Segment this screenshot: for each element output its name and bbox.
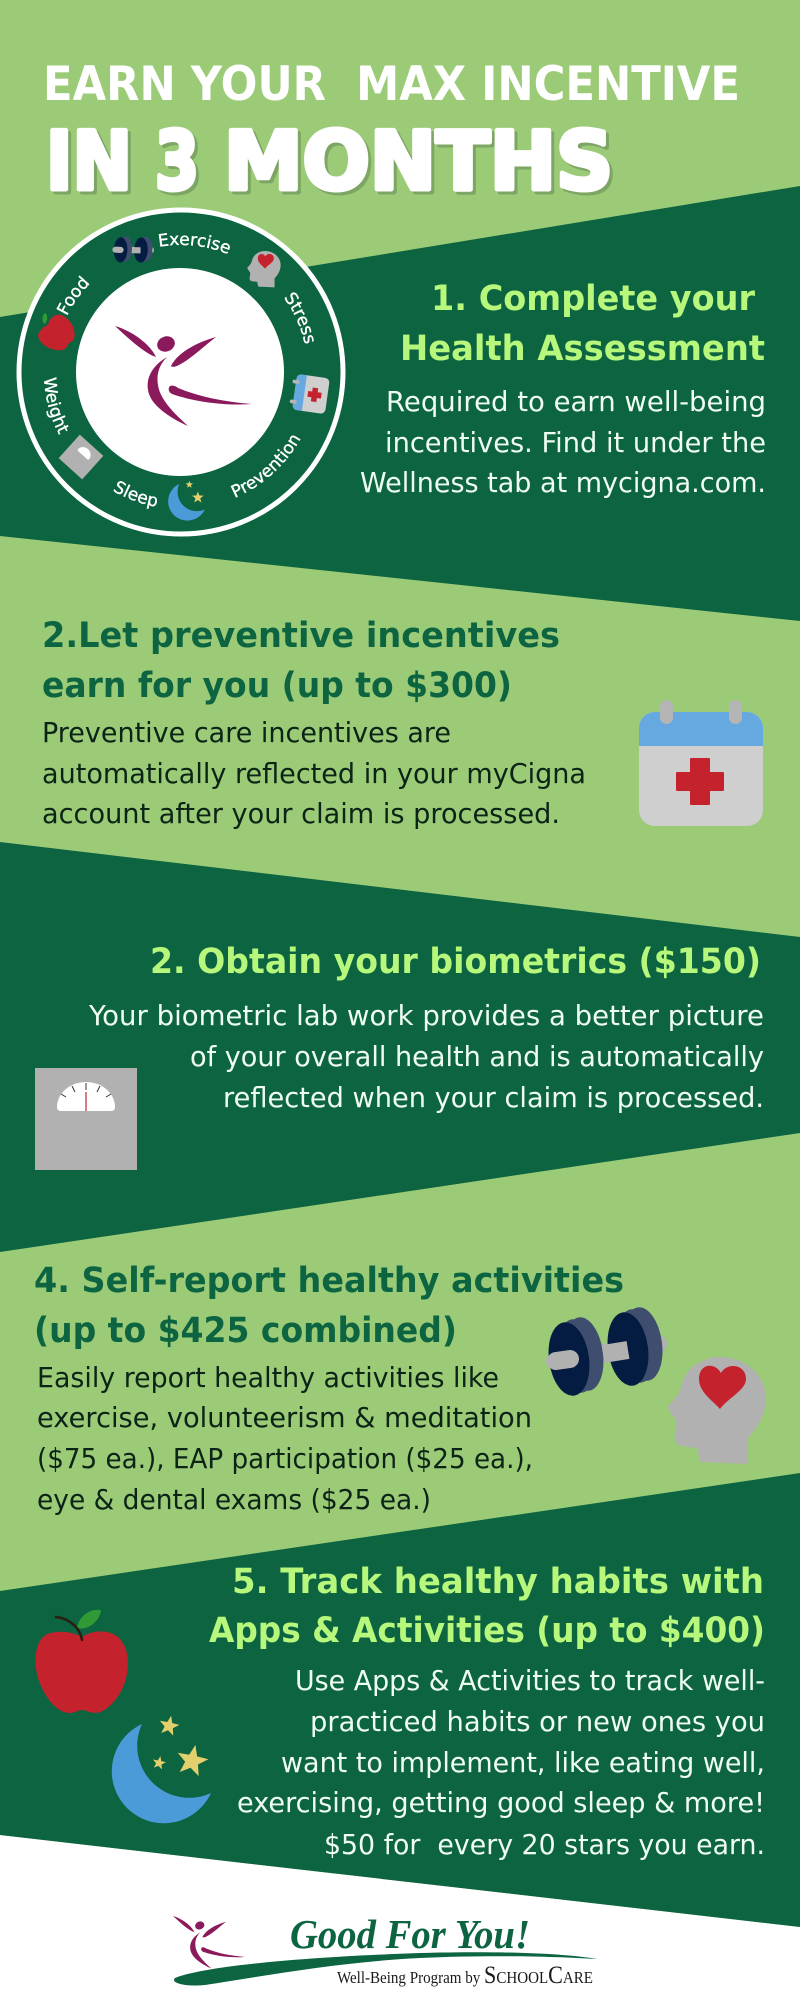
text block: step 5: Use Apps & Activities to track well- (295, 1665, 765, 1697)
heading: step 3: 2. Obtain your biometrics ($150) (150, 942, 761, 982)
heading: step 2: 2.Let preventive incentives (42, 616, 560, 656)
icon: small apple (29, 305, 81, 357)
logo figure (173, 1916, 245, 1968)
heading: step 4: (up to $425 combined) (34, 1311, 457, 1351)
wheel label: stress: Stress (284, 292, 314, 344)
text block: step 5: exercising, getting good sleep & more! (237, 1787, 765, 1819)
icon: weight scale (35, 1068, 137, 1170)
heading: step 2: earn for you (up to $300) (42, 666, 512, 706)
panel: step 2 preventive incentives (42, 616, 763, 830)
text block: step 2 (42, 717, 586, 830)
heading: step 4: 4. Self-report healthy activities (34, 1261, 624, 1301)
wheel label: prevention: Prevention (230, 436, 300, 498)
heading: step 4 (34, 1261, 624, 1351)
text block: step 2: automatically reflected in your myCigna (42, 758, 586, 790)
panel: step 3 biometrics (0, 842, 800, 1252)
wheel label: weight: Weight (44, 377, 68, 435)
heading: step 1: Health Assessment (400, 329, 765, 369)
logo wordmark: Good For You! (290, 1911, 530, 1957)
panel: step 1 health assessment (0, 186, 800, 621)
text block: step 1: Required to earn well-being (386, 386, 766, 418)
title: IN (46, 115, 132, 208)
text block: step 4: eye & dental exams ($25 ea.) (37, 1484, 431, 1516)
heading: step 2 (42, 616, 560, 706)
text block: step 4 (37, 1362, 533, 1516)
heading: step 1: 1. Complete your (431, 279, 756, 319)
wheel label: sleep: Sleep (114, 481, 158, 509)
text block: step 3: Your biometric lab work provides a better picture (88, 1000, 764, 1032)
text block: step 2: account after your claim is processed. (42, 798, 560, 830)
heading: step 1 (400, 279, 765, 369)
heading: step 5: Apps & Activities (up to $400) (209, 1611, 765, 1651)
title: 3 (155, 115, 199, 208)
logo: Good For You (173, 1911, 597, 1989)
icon: dumbbell (544, 1305, 667, 1398)
title: EARN YOUR MAX INCENTIVE (43, 57, 740, 112)
icon: small moon and stars (168, 481, 205, 521)
text block: step 1: Wellness tab at mycigna.com. (360, 467, 766, 499)
icon: small dumbbell (110, 230, 156, 269)
logo swoosh (174, 1952, 597, 1986)
text block: step 4: ($75 ea.), EAP participation ($25 ea.), (37, 1443, 533, 1475)
text block: step 3: reflected when your claim is processed. (223, 1082, 764, 1114)
wheel label: food: Food (56, 275, 90, 315)
icon: small calendar (289, 373, 330, 414)
icon: head with heart (668, 1357, 766, 1464)
icon: moon and stars (112, 1714, 211, 1823)
text block: step 1 (360, 386, 766, 499)
text block: step 2: Preventive care incentives are (42, 717, 451, 749)
icon: calendar with medical cross (639, 700, 763, 826)
icon: apple (36, 1610, 128, 1713)
icon: leaping figure (115, 326, 252, 426)
wheel label: exercise: Exercise (158, 233, 230, 254)
text block: step 4: Easily report healthy activities like (37, 1362, 499, 1394)
text block: step 5: want to implement, like eating well, (281, 1747, 765, 1779)
text block: step 4: exercise, volunteerism & meditation (37, 1402, 532, 1434)
wheel: well-being topics (16, 208, 346, 536)
text block: step 5 (237, 1665, 765, 1861)
text block: step 5: practiced habits or new ones you (310, 1706, 765, 1738)
heading: step 5: 5. Track healthy habits with (232, 1562, 764, 1602)
title: MONTHS (224, 115, 613, 208)
text block: step 3: of your overall health and is automatically (190, 1041, 764, 1073)
text block: step 5: $50 for every 20 stars you earn. (324, 1829, 765, 1861)
logo tagline: Well-Being Program by SCHOOLCARE (337, 1962, 593, 1989)
icon: small scale (59, 435, 103, 479)
title (43, 57, 740, 208)
text block: step 3 (88, 1000, 764, 1114)
icon: small head with heart (247, 251, 281, 287)
text block: step 1: incentives. Find it under the (385, 427, 766, 459)
panel: step 4 self-report (34, 1261, 766, 1516)
heading: step 5 (209, 1562, 765, 1651)
panel: step 5 apps and activities (0, 1473, 800, 1927)
